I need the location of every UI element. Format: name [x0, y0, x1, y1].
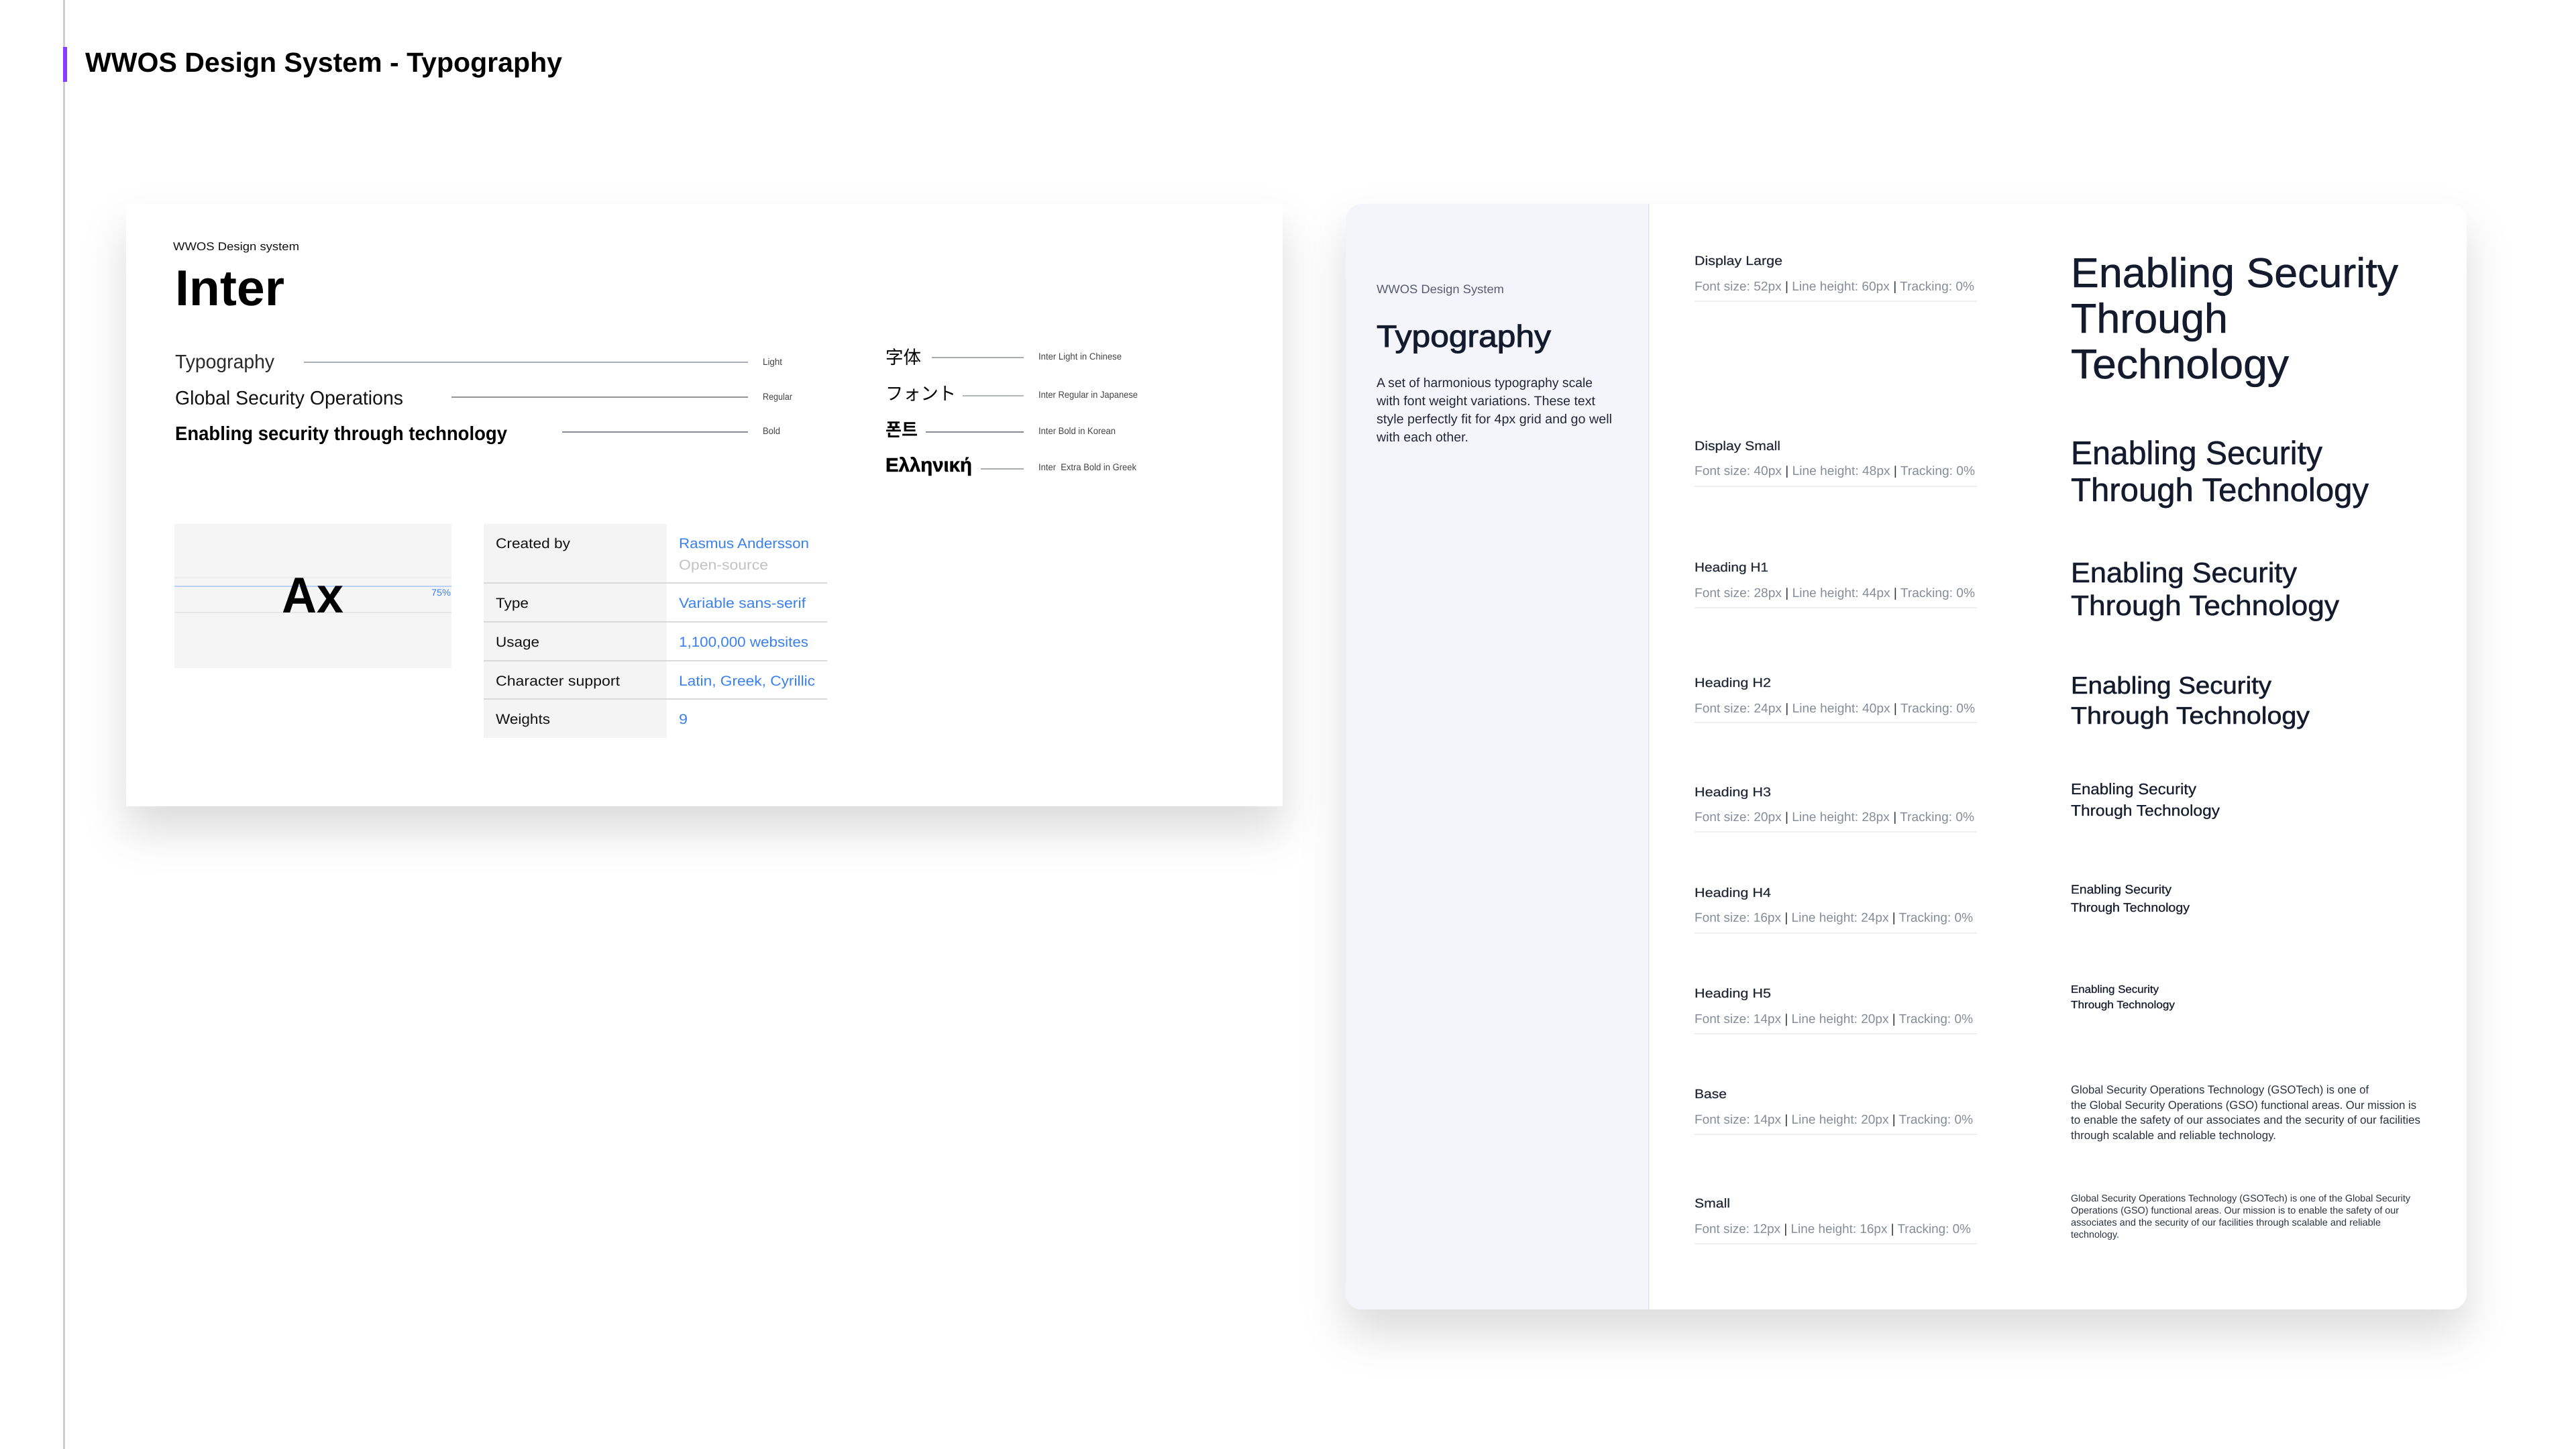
weight sample: Regular: Global Security Operations [175, 388, 403, 409]
language sample: Greek [885, 455, 1137, 476]
sidebar description: with each other. [1376, 430, 1468, 445]
scale row: Base: Global Security Operations Technology (GSOTech) is one of [2071, 1083, 2369, 1096]
glyph metrics specimen: Ax [174, 524, 451, 668]
scale row: Base: Base [1695, 1087, 1727, 1102]
glyph metrics specimen: Ax: 75% [431, 587, 451, 598]
scale row: Small: Operations (GSO) functional areas. Our mission is to enable the safety of our [2071, 1205, 2399, 1216]
scale row: Heading H3: Heading H3 [1695, 786, 1771, 800]
scale row: Heading H1: Heading H1 [1695, 561, 1768, 575]
language sample: Chinese: Inter Light in Chinese [1038, 351, 1122, 362]
scale row: Display Large: Enabling Security [2071, 250, 2398, 297]
scale row: Base [1695, 1083, 2420, 1142]
language sample: Greek: Inter Extra Bold in Greek [1038, 462, 1137, 472]
row: Usage: 1,100,000 websites [679, 635, 808, 650]
scale row: Heading H4 [1695, 882, 2190, 934]
scale row: Display Small [1695, 435, 2369, 508]
weight sample: Regular [175, 388, 792, 409]
sidebar [1346, 204, 1649, 1309]
scale row: Heading H2 [1695, 672, 2310, 729]
scale row: Heading H2: Enabling Security [2071, 672, 2271, 699]
scale row: Heading H3: Through Technology [2071, 802, 2220, 819]
scale row: Heading H1: Font size: 28px | Line height: 44px | Tracking: 0% [1695, 586, 1975, 600]
scale row: Heading H3: Enabling Security [2071, 780, 2197, 798]
scale row: Base: to enable the safety of our associates and the security of our facilities [2071, 1114, 2420, 1126]
scale row: Small [1695, 1193, 2411, 1244]
weight sample: Light: Light [763, 356, 782, 367]
scale row: Heading H5: Heading H5 [1695, 987, 1771, 1001]
scale row: Heading H2: Font size: 24px | Line height: 40px | Tracking: 0% [1695, 702, 1975, 716]
panel: typography scale card [1346, 204, 2467, 1309]
language sample: Chinese [885, 343, 1122, 369]
weight sample: Bold: Enabling security through technology [175, 423, 507, 445]
row: Character support: Latin, Greek, Cyrillic [679, 674, 815, 689]
scale row: Heading H3: Font size: 20px | Line height: 28px | Tracking: 0% [1695, 810, 1974, 824]
language sample: Chinese: 字体 [885, 343, 921, 369]
weight sample: Bold: Bold [763, 425, 780, 436]
scale row: Base: through scalable and reliable technology. [2071, 1129, 2276, 1142]
row: Character support [496, 674, 815, 689]
row: Weights: 9 [679, 712, 688, 727]
scale row: Display Small: Font size: 40px | Line height: 48px | Tracking: 0% [1695, 464, 1975, 478]
language sample: Korean: Inter Bold in Korean [1038, 425, 1116, 436]
sidebar description: with font weight variations. These text [1376, 394, 1596, 409]
scale row: Small: Global Security Operations Technology (GSOTech) is one of the Global Security [2071, 1193, 2411, 1204]
weight sample: Light [175, 352, 782, 373]
row: Type: Type [496, 596, 529, 611]
scale row: Heading H1: Enabling Security [2071, 557, 2297, 588]
weight sample: Bold [175, 423, 780, 445]
row: Created by [496, 536, 809, 573]
spec table [484, 524, 827, 738]
scale row: Heading H5 [1695, 984, 2175, 1034]
row: Weights [496, 712, 688, 727]
language sample: Japanese: フォント [885, 379, 956, 405]
scale row: Heading H1 [1695, 557, 2339, 621]
scale row: Heading H5: Font size: 14px | Line height: 20px | Tracking: 0% [1695, 1012, 1973, 1026]
scale row: Heading H4: Heading H4 [1695, 886, 1771, 900]
row: Type [496, 596, 806, 611]
sidebar description: style perfectly fit for 4px grid and go well [1377, 412, 1612, 427]
row: Type: Variable sans-serif [679, 596, 806, 611]
scale row: Display Large: Display Large [1695, 254, 1782, 268]
scale row: Display Large: Through [2071, 296, 2228, 342]
scale row: Heading H2: Heading H2 [1695, 676, 1771, 690]
weight sample: Light: Typography [175, 352, 274, 373]
row: Created by: Rasmus Andersson [679, 536, 809, 551]
scale row: Display Small: Through Technology [2071, 472, 2369, 508]
scale row: Base: Font size: 14px | Line height: 20px | Tracking: 0% [1695, 1113, 1973, 1127]
row: Weights: Weights [496, 712, 550, 727]
scale row: Base: the Global Security Operations (GSO) functional areas. Our mission is [2071, 1099, 2416, 1112]
language sample: Greek: Ελληνική [885, 455, 972, 476]
scale row: Small: associates and the security of our facilities through scalable and reliable [2071, 1218, 2381, 1228]
scale row: Display Small: Enabling Security [2071, 435, 2322, 472]
row: Usage [496, 635, 808, 650]
scale row: Heading H5: Through Technology [2071, 1000, 2175, 1011]
scale row: Display Small: Display Small [1695, 439, 1780, 453]
title: WWOS Design System - Typography: WWOS Design System - Typography [85, 47, 562, 78]
language sample: Korean: 폰트 [885, 415, 918, 441]
sidebar eyebrow: WWOS Design System [1377, 282, 1504, 296]
language sample: Korean [885, 415, 1116, 441]
row: Created by: Open-source [679, 557, 768, 573]
eyebrow: WWOS Design system: WWOS Design system [173, 240, 299, 253]
scale row: Display Large: Font size: 52px | Line height: 60px | Tracking: 0% [1695, 280, 1974, 294]
scale row: Display Large [1695, 250, 2398, 388]
scale row: Small: Font size: 12px | Line height: 16px | Tracking: 0% [1695, 1222, 1971, 1236]
glyph metrics specimen: Ax: Ax [282, 567, 343, 623]
language sample: Japanese: Inter Regular in Japanese [1038, 389, 1138, 400]
scale row: Heading H3 [1695, 780, 2220, 833]
weight sample: Regular: Regular [763, 391, 792, 402]
scale row: Heading H4: Enabling Security [2071, 882, 2172, 896]
row: Created by: Created by [496, 536, 571, 551]
scale row: Heading H2: Through Technology [2071, 702, 2310, 729]
scale row: Heading H5: Enabling Security [2071, 984, 2159, 996]
row: Usage: Usage [496, 635, 539, 650]
sidebar heading: Typography [1377, 319, 1551, 354]
scale row: Small: Small [1695, 1197, 1730, 1211]
heading: Inter: Inter [175, 260, 284, 316]
scale row: Display Large: Technology [2071, 341, 2289, 388]
scale row: Small: technology. [2071, 1230, 2119, 1240]
sidebar description: A set of harmonious typography scale [1377, 376, 1593, 390]
sidebar description [1376, 376, 1612, 445]
scale row: Heading H4: Font size: 16px | Line height: 24px | Tracking: 0% [1695, 911, 1973, 925]
panel: Inter typeface overview card [126, 204, 1283, 806]
scale row: Heading H4: Through Technology [2071, 900, 2190, 914]
language sample: Japanese [885, 379, 1138, 405]
scale row: Heading H1: Through Technology [2071, 590, 2339, 621]
row: Character support: Character support [496, 674, 620, 689]
